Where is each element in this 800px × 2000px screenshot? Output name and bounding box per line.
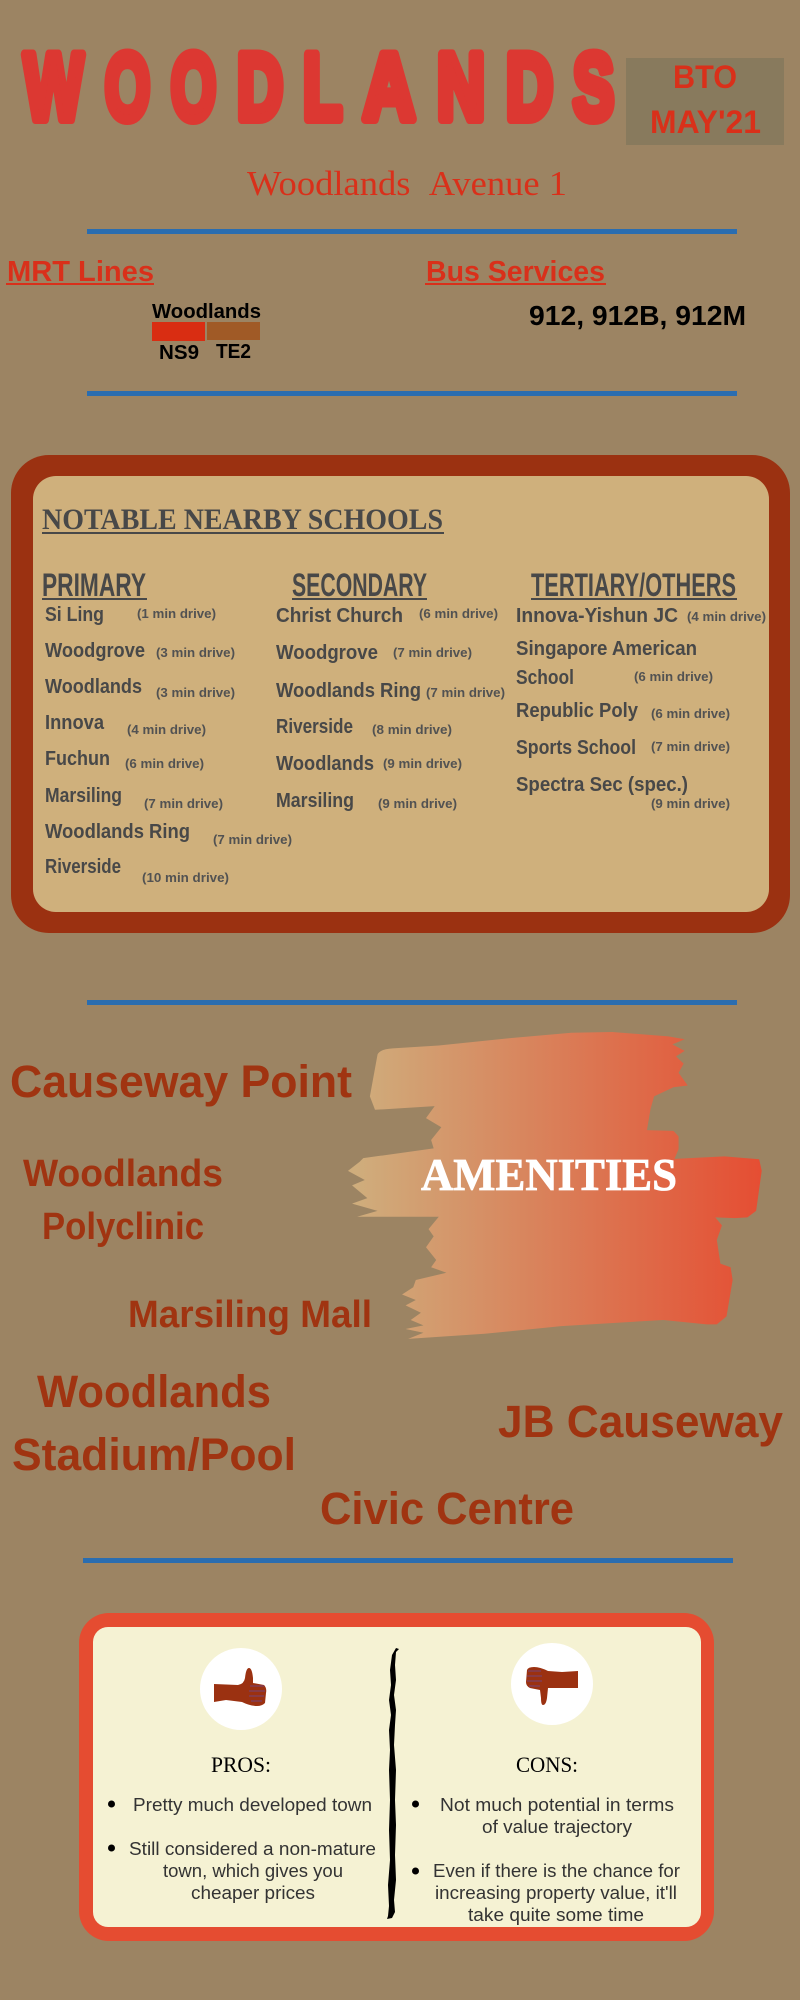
- column: secondary: Woodlands: [276, 753, 374, 775]
- column: secondary: Riverside: [276, 716, 353, 738]
- column: primary: Riverside: [45, 856, 121, 878]
- bus service numbers: 912, 912B, 912M: [529, 300, 746, 331]
- amenity: Woodlands Polyclinic: [23, 1153, 223, 1248]
- amenity: Woodlands Polyclinic: Woodlands: [23, 1153, 223, 1195]
- column: primary: PRIMARY: [42, 567, 146, 603]
- heading: MRT Lines: MRT Lines: [7, 256, 154, 288]
- title: O: [171, 34, 216, 139]
- amenity: Causeway Point: Causeway Point: [10, 1056, 352, 1107]
- cons column: Not much potential in terms: [440, 1795, 674, 1815]
- column: primary: Marsiling: [45, 785, 122, 807]
- panel: notable nearby schools: [11, 455, 790, 933]
- title: L: [303, 34, 342, 139]
- column: primary: (7 min drive): [144, 796, 223, 811]
- cons column: [412, 1752, 680, 1925]
- BTO date badge: BTO: [673, 59, 737, 95]
- amenity: Marsiling Mall: Marsiling Mall: [128, 1294, 372, 1336]
- column: tertiary and others: (9 min drive): [651, 796, 730, 811]
- amenity: Woodlands Stadium/Pool: Woodlands: [37, 1366, 271, 1417]
- subtitle: address: Woodlands Avenue 1: [247, 164, 567, 203]
- column: secondary: [276, 567, 505, 812]
- panel: pros and cons: [79, 1613, 714, 1941]
- column: primary: (7 min drive): [213, 832, 292, 847]
- amenity: JB Causeway: JB Causeway: [498, 1396, 783, 1447]
- pros column: Still considered a non-mature: [129, 1839, 376, 1859]
- pros column: PROS:: [211, 1752, 271, 1777]
- amenities heading: AMENITIES: [421, 1149, 677, 1200]
- column: secondary: (6 min drive): [419, 606, 498, 621]
- column: secondary: (7 min drive): [426, 685, 505, 700]
- column: secondary: (9 min drive): [383, 756, 462, 771]
- amenity: Woodlands Stadium/Pool: [12, 1366, 296, 1480]
- column: primary: Woodlands Ring: [45, 821, 190, 843]
- column: primary: (4 min drive): [127, 722, 206, 737]
- MRT station marker: Woodlands: [152, 301, 261, 323]
- column: secondary: (7 min drive): [393, 645, 472, 660]
- cons column: Even if there is the chance for: [433, 1861, 680, 1881]
- title: A: [363, 34, 415, 139]
- cons column: take quite some time: [468, 1905, 644, 1925]
- column: primary: (3 min drive): [156, 645, 235, 660]
- column: primary: [42, 567, 292, 885]
- MRT station marker: NS9: [159, 342, 199, 364]
- title: [24, 34, 614, 139]
- column: tertiary and others: Republic Poly: [516, 700, 639, 722]
- amenity: Woodlands Polyclinic: Polyclinic: [42, 1206, 204, 1248]
- column: primary: (3 min drive): [156, 685, 235, 700]
- pros column: Pretty much developed town: [133, 1795, 372, 1815]
- title: S: [573, 34, 614, 139]
- pros column: cheaper prices: [191, 1883, 315, 1903]
- column: tertiary and others: (6 min drive): [634, 669, 713, 684]
- title: N: [437, 34, 485, 139]
- column: primary: Fuchun: [45, 748, 110, 770]
- column: secondary: Woodlands Ring: [276, 680, 421, 702]
- MRT station marker: [152, 301, 261, 364]
- title: O: [105, 34, 150, 139]
- column: tertiary and others: Spectra Sec (spec.): [516, 774, 688, 796]
- column: secondary: (8 min drive): [372, 722, 452, 737]
- column: secondary: (9 min drive): [378, 796, 457, 811]
- icon: thumbs up: [200, 1648, 282, 1730]
- column: tertiary and others: Innova-Yishun JC: [516, 605, 678, 627]
- column: tertiary and others: (7 min drive): [651, 739, 730, 754]
- column: secondary: Woodgrove: [276, 642, 378, 664]
- MRT station marker: TE2: [216, 341, 251, 363]
- column: primary: (1 min drive): [137, 606, 216, 621]
- cons column: increasing property value, it'll: [435, 1883, 677, 1903]
- icon: thumbs down: [511, 1643, 593, 1725]
- schools heading: NOTABLE NEARBY SCHOOLS: [42, 503, 443, 536]
- BTO date badge: MAY'21: [650, 104, 761, 140]
- pros column: [108, 1752, 376, 1903]
- amenity: Woodlands Stadium/Pool: Stadium/Pool: [12, 1429, 296, 1480]
- title: D: [506, 34, 553, 139]
- brush stroke behind amenities heading: [348, 1032, 762, 1339]
- column: secondary: Christ Church: [276, 605, 403, 627]
- divider: rough vertical line: [387, 1648, 399, 1919]
- column: primary: Woodgrove: [45, 640, 145, 662]
- column: primary: (6 min drive): [125, 756, 204, 771]
- column: tertiary and others: [516, 567, 766, 811]
- cons column: CONS:: [516, 1752, 578, 1777]
- pros column: town, which gives you: [163, 1861, 343, 1881]
- column: secondary: Marsiling: [276, 790, 354, 812]
- column: tertiary and others: (6 min drive): [651, 706, 730, 721]
- column: primary: Woodlands: [45, 676, 142, 698]
- column: tertiary and others: Singapore American: [516, 638, 697, 660]
- column: secondary: SECONDARY: [292, 567, 427, 603]
- column: primary: Innova: [45, 712, 105, 734]
- cons column: of value trajectory: [482, 1817, 632, 1837]
- amenity: Civic Centre: Civic Centre: [320, 1483, 574, 1534]
- column: tertiary and others: (4 min drive): [687, 609, 766, 624]
- column: primary: (10 min drive): [142, 870, 229, 885]
- BTO date badge: [626, 58, 784, 145]
- column: tertiary and others: School: [516, 667, 574, 689]
- column: primary: Si Ling: [45, 604, 104, 626]
- column: tertiary and others: Sports School: [516, 737, 636, 759]
- title: D: [237, 34, 283, 139]
- title: W: [24, 34, 83, 139]
- heading: Bus Services: Bus Services: [426, 256, 605, 288]
